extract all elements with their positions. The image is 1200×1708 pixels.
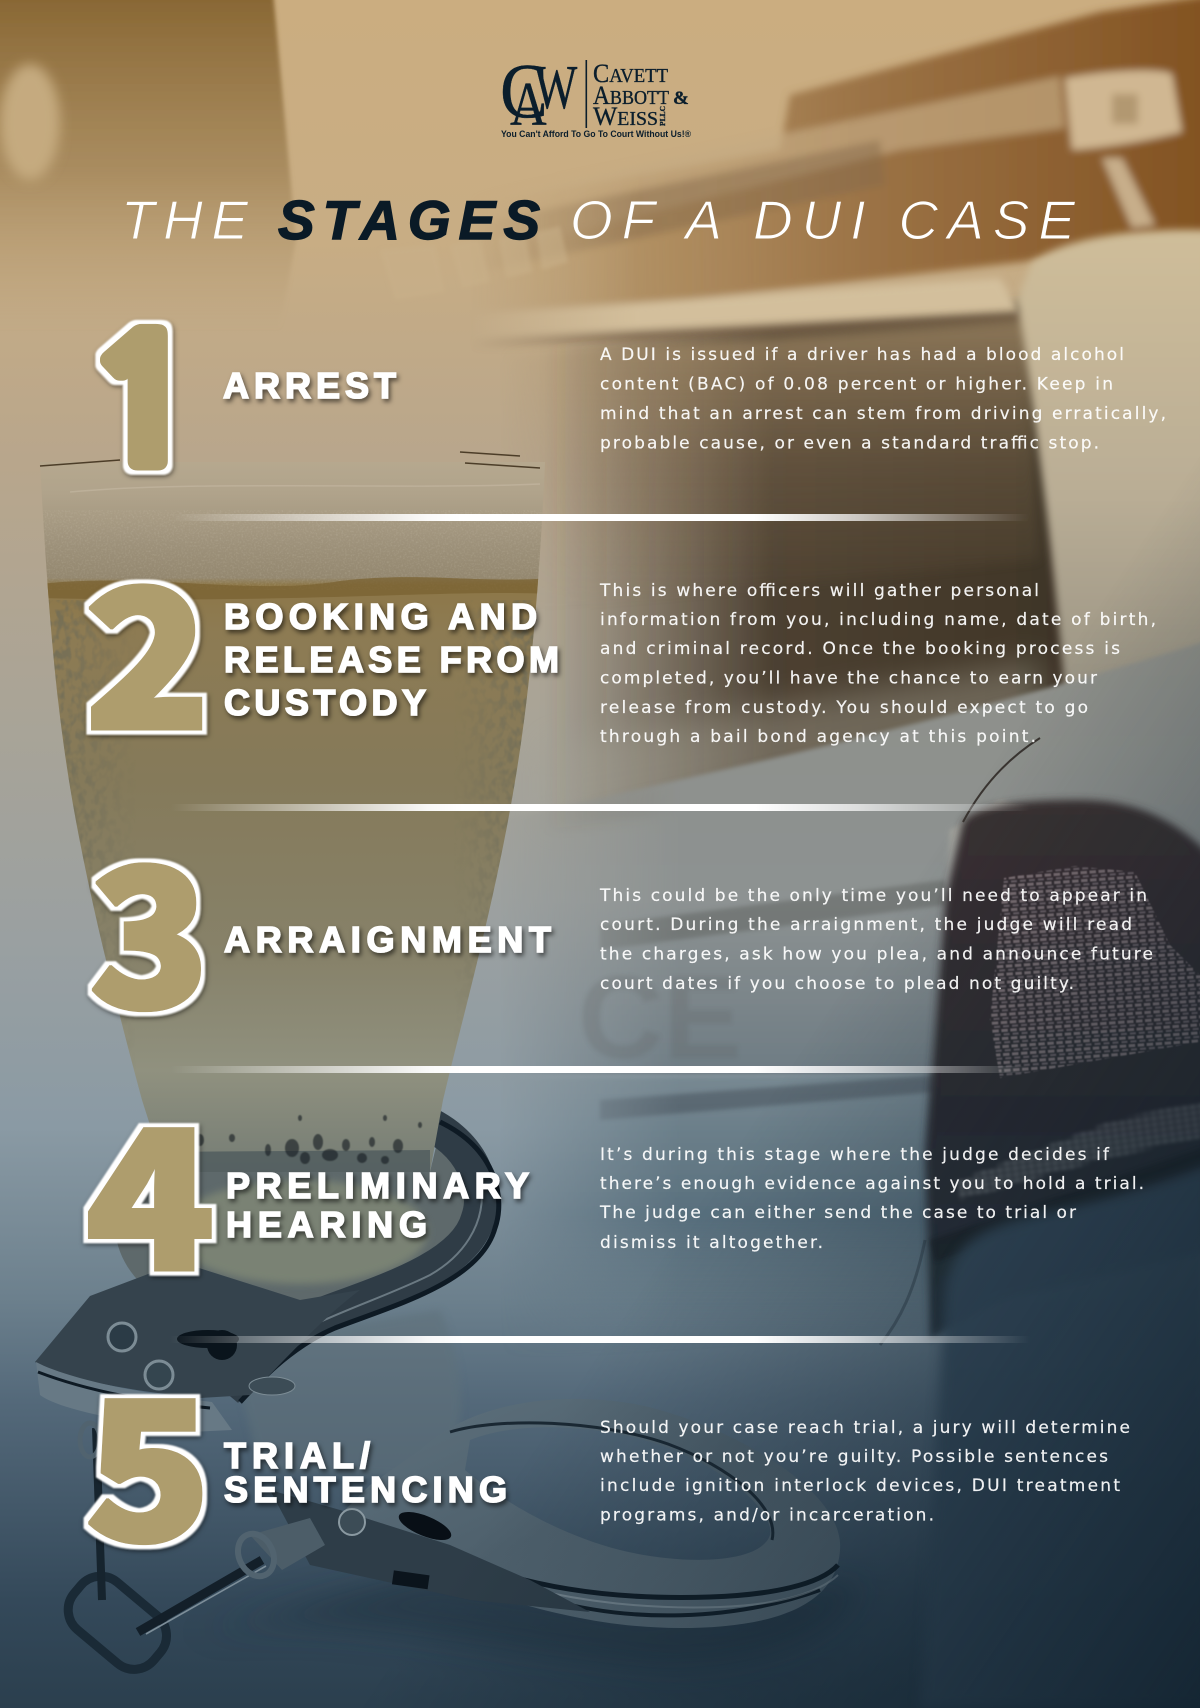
handcuffs: [35, 1262, 860, 1680]
heading: SENTENCING: [224, 1469, 507, 1510]
number 2: 2: [85, 506, 210, 784]
heading: ARREST: [223, 365, 396, 406]
divider 1: [170, 514, 1030, 521]
light bar lamps behind title: [380, 226, 568, 300]
description: The judge can either send the case to trial or: [599, 1203, 1076, 1223]
heading: [224, 1435, 507, 1510]
stage 2: booking and release: [85, 506, 1156, 784]
description: and criminal record. Once the booking process is: [600, 639, 1120, 659]
heading: [226, 1165, 529, 1245]
divider 4: [170, 1336, 1030, 1343]
heading: HEARING: [226, 1204, 427, 1245]
description: probable cause, or even a standard traffic stop.: [600, 434, 1099, 454]
number 3: 3: [90, 784, 209, 1062]
lower cuff hinge plate: [270, 1490, 590, 1612]
title: [121, 189, 1076, 251]
heading: [224, 596, 559, 723]
stage 1: arrest: [88, 317, 1166, 488]
number 5: 5: [86, 1318, 211, 1596]
logo monogram: C: [500, 48, 548, 135]
logo monogram: W: [534, 52, 578, 122]
title: STAGES: [278, 189, 540, 251]
heading: TRIAL/: [224, 1435, 370, 1476]
description: [600, 345, 1166, 454]
description: court. During the arraignment, the judge will read: [600, 915, 1132, 935]
description: dismiss it altogether.: [600, 1233, 823, 1253]
car window dark area: [545, 300, 1085, 830]
blurred reflection: [0, 64, 60, 180]
stage 3: arraignment: [90, 784, 1153, 1062]
description: information from you, including name, date of birth,: [600, 610, 1156, 630]
divider 2: [170, 804, 1030, 811]
logo divider: [586, 60, 587, 128]
upper cuff hinge plate: [35, 1262, 360, 1398]
description: include ignition interlock devices, DUI treatment: [600, 1476, 1120, 1496]
description: [599, 1145, 1144, 1253]
logo: Cavett Abbott & Weiss: [500, 48, 691, 139]
heading: ARRAIGNMENT: [224, 919, 551, 960]
logo wordmark: WEISS: [593, 102, 658, 131]
lower car body panel: [540, 643, 1200, 1306]
description: court dates if you choose to plead not guilty.: [600, 974, 1074, 994]
tail light: [920, 800, 1200, 1708]
ground shadow: [170, 1570, 860, 1668]
chain links: [58, 1566, 177, 1680]
description: [599, 886, 1153, 994]
description: completed, you’ll have the chance to earn your: [600, 668, 1097, 688]
police car roof and light bar: [504, 0, 1200, 346]
heading: CUSTODY: [224, 682, 426, 723]
description: A DUI is issued if a driver has had a blood alcohol: [600, 345, 1124, 365]
description: Should your case reach trial, a jury will determine: [600, 1418, 1130, 1438]
lower cuff ring: [330, 1399, 840, 1628]
stage 4: preliminary hearing: [86, 1047, 1144, 1325]
brown wall at top left: [0, 0, 296, 330]
window lower reflection: [545, 660, 1040, 830]
heading: RELEASE FROM: [224, 639, 559, 680]
logo monogram: [500, 48, 578, 139]
heading: PRELIMINARY: [226, 1165, 529, 1206]
logo wordmark: &: [673, 88, 689, 109]
description: It’s during this stage where the judge decides if: [600, 1145, 1110, 1165]
title: OF A DUI CASE: [570, 189, 1076, 251]
glass rim marks: [40, 452, 540, 468]
divider 3: [170, 1066, 1030, 1073]
description: release from custody. You should expect to go: [600, 698, 1088, 718]
logo monogram: A: [510, 70, 547, 139]
description: the charges, ask how you plea, and announce future: [600, 944, 1153, 964]
logo wordmark: PLLC: [658, 106, 667, 126]
logo wordmark: [593, 59, 689, 131]
description: through a bail bond agency at this point.: [600, 727, 1036, 747]
description: whether or not you’re guilty. Possible sentences: [600, 1447, 1108, 1467]
logo wordmark: ABBOTT: [593, 81, 669, 110]
description: This is where officers will gather personal: [599, 581, 1039, 601]
stage 5: trial and sentencing: [86, 1318, 1130, 1596]
faint police lettering on car: CE: [578, 952, 742, 1084]
number 4: 4: [86, 1047, 215, 1325]
description: there’s enough evidence against you to hold a trial.: [600, 1174, 1144, 1194]
rivets and keyhole: [108, 1323, 136, 1351]
logo tagline: You Can't Afford To Go To Court Without Us!®: [501, 129, 691, 139]
description: This could be the only time you’ll need to appear in: [599, 886, 1147, 906]
beer glass: [30, 450, 560, 1180]
car pillar: [1017, 230, 1200, 760]
logo wordmark: CAVETT: [593, 59, 668, 88]
heading: BOOKING AND: [224, 596, 537, 637]
description: [600, 1418, 1130, 1526]
description: [599, 581, 1156, 747]
description: mind that an arrest can stem from driving erratically,: [600, 404, 1166, 424]
upper cuff ring: [225, 1118, 499, 1402]
car panel lines: [963, 738, 1040, 822]
condensation at bottom of glass: [196, 1115, 422, 1164]
description: programs, and/or incarceration.: [600, 1506, 934, 1526]
number 1: 1: [88, 317, 200, 488]
title: THE: [121, 189, 249, 251]
window upper tint: [576, 315, 1038, 556]
glass base on coaster: [115, 1130, 492, 1480]
description: content (BAC) of 0.08 percent or higher. Keep in: [600, 374, 1113, 394]
